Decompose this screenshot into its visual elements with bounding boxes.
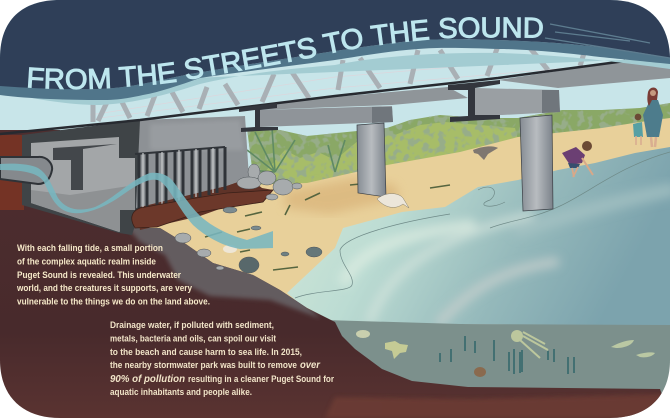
drainage text: metals, bacteria and oils, can spoil our visit <box>110 334 276 344</box>
sand shading <box>285 178 400 214</box>
water streaks <box>345 190 670 322</box>
eelgrass <box>440 336 574 374</box>
girder right <box>448 80 500 122</box>
sky <box>0 0 670 200</box>
drain pipe <box>0 157 52 184</box>
snail <box>474 367 486 377</box>
sea creatures <box>356 330 655 377</box>
grey embankment <box>125 222 320 318</box>
vault floor shade <box>31 185 135 232</box>
intro text: of the complex aquatic realm inside <box>17 256 156 268</box>
brown soil under grate <box>140 182 272 230</box>
drainage text: the nearby stormwater park was built to remove <box>110 360 297 370</box>
child crouching <box>562 141 593 177</box>
beach <box>140 118 670 320</box>
vault front face <box>136 116 249 208</box>
shell on beach <box>223 245 237 253</box>
pale wave <box>0 53 670 105</box>
teal wave <box>0 39 670 100</box>
left soil behind vault <box>0 135 24 210</box>
deck top line <box>0 61 625 134</box>
truss under the bridge <box>90 46 590 122</box>
pier cap left <box>260 106 393 127</box>
deck right span <box>498 62 670 88</box>
girder left <box>239 103 278 132</box>
pier cap right <box>475 88 560 115</box>
fish <box>611 340 634 348</box>
vault outer wall <box>22 120 140 235</box>
seabed water <box>325 320 670 405</box>
metal grate <box>135 147 225 210</box>
vault chamber <box>31 137 135 232</box>
title band <box>0 0 670 105</box>
soil lower band <box>325 394 670 418</box>
drainage text: resulting in a cleaner Puget Sound for <box>188 374 334 384</box>
pier cap left shaded end <box>372 107 393 123</box>
intro text <box>16 243 210 308</box>
vault baffle <box>53 144 117 190</box>
intro text: With each falling tide, a small portion <box>17 243 163 254</box>
rocks <box>175 164 322 273</box>
drainage text <box>110 320 334 397</box>
vault concrete <box>22 116 249 235</box>
water <box>287 147 670 326</box>
bridge deck <box>0 61 670 134</box>
drainage text: over <box>300 359 321 371</box>
crab <box>356 330 370 338</box>
gull white <box>377 194 409 208</box>
title: FROM THE STREETS TO THE SOUND <box>28 17 543 90</box>
woman and small child <box>633 88 663 147</box>
navy header <box>0 0 670 89</box>
drainage text: Drainage water, if polluted with sediment, <box>110 320 274 330</box>
intro text: Puget Sound is revealed. This underwater <box>17 270 181 281</box>
beach seaweed <box>205 183 450 270</box>
drainage text: aquatic inhabitants and people alike. <box>110 387 252 397</box>
drainage text: to the beach and cause harm to sea life. In 2015, <box>110 347 302 357</box>
drainage text: 90% of pollution <box>110 373 185 385</box>
fish <box>636 352 655 357</box>
shrubs <box>247 103 670 192</box>
shoreline ripples <box>295 152 670 298</box>
piers <box>357 115 553 211</box>
deck left span <box>260 87 468 110</box>
teal flow ribbon <box>0 164 273 249</box>
sea star <box>385 341 408 359</box>
soil <box>0 130 670 418</box>
gull brown <box>473 146 498 160</box>
intro text: vulnerable to the things we do on the land above. <box>17 296 210 308</box>
speed lines <box>545 24 670 58</box>
log <box>132 190 273 228</box>
intro text: world, and the creatures it supports, are very <box>16 283 193 294</box>
jellyfish <box>511 330 548 358</box>
